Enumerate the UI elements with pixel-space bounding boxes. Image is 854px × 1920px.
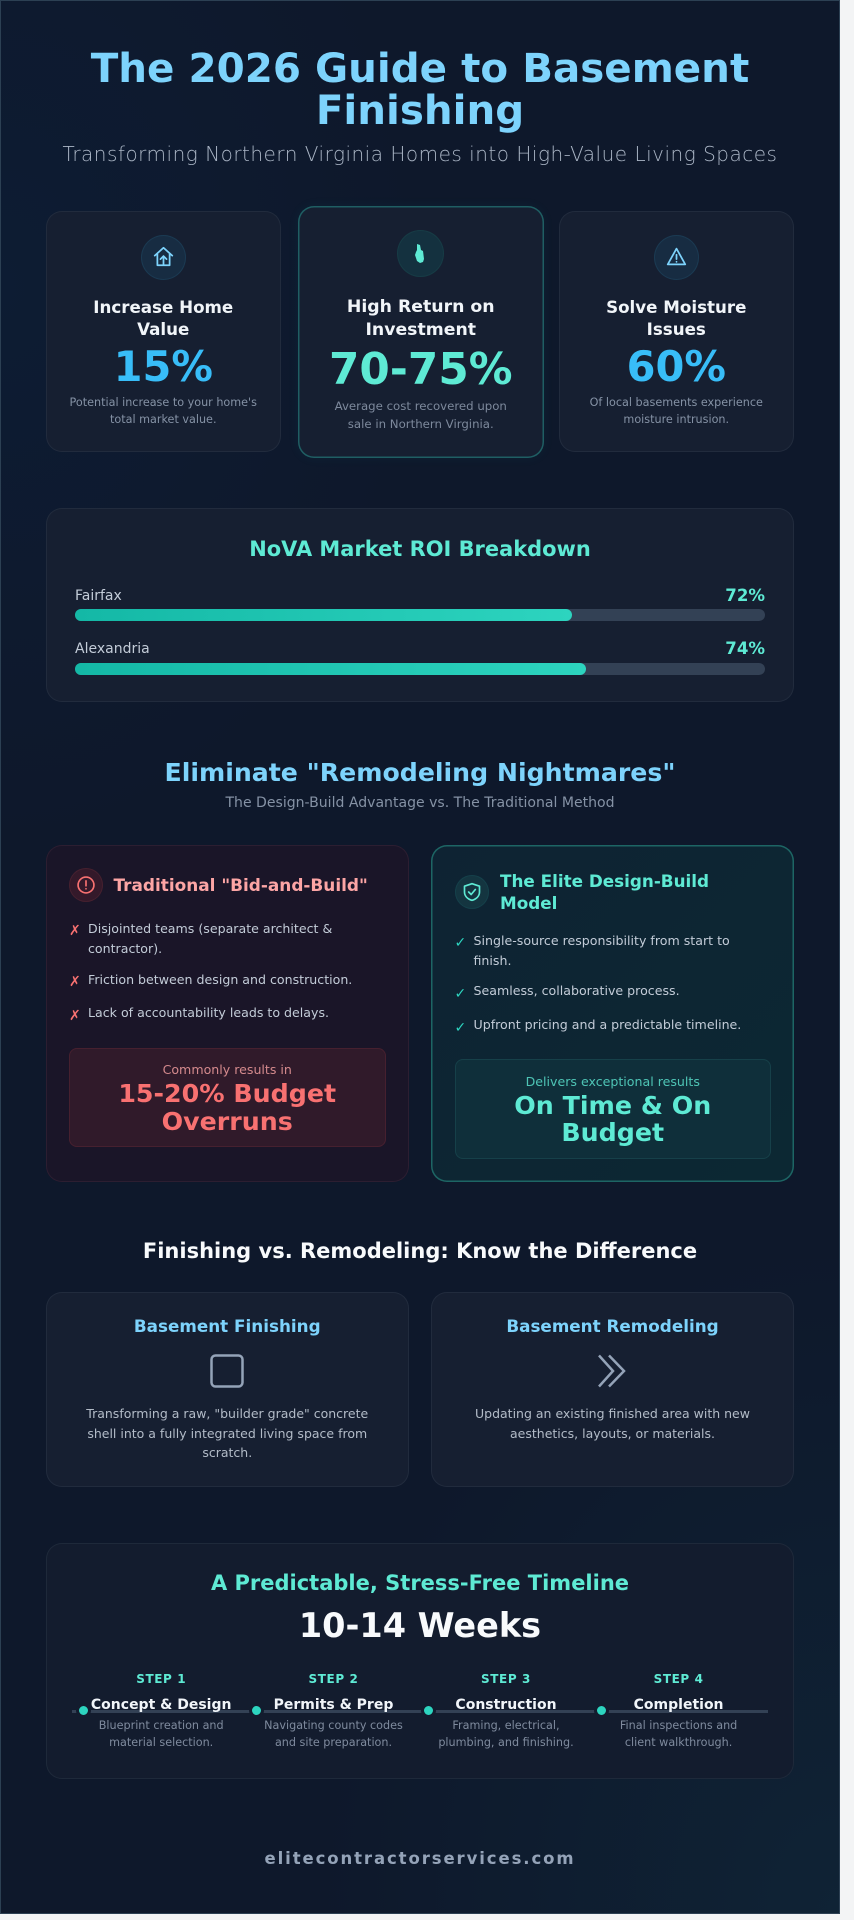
card heading: Issues — [647, 319, 706, 339]
marker: ✗ — [69, 1008, 81, 1024]
list item — [474, 932, 730, 968]
step 2: Permits & Prep — [274, 1697, 393, 1713]
section heading: Eliminate "Remodeling Nightmares" — [164, 758, 676, 787]
card description — [590, 396, 763, 426]
panel heading: Basement Remodeling — [506, 1316, 719, 1336]
panel: NoVA market ROI breakdown — [46, 508, 794, 702]
panel: high return on investment — [298, 206, 544, 458]
step 1: material selection. — [109, 1736, 213, 1749]
timeline heading: A Predictable, Stress-Free Timeline — [211, 1571, 629, 1595]
card description: Of local basements experience — [590, 396, 763, 408]
step 3: Framing, electrical, — [452, 1719, 560, 1732]
step 1 — [91, 1672, 231, 1749]
panel: solve moisture issues — [559, 211, 794, 452]
step 4 — [620, 1672, 737, 1749]
bar label: Fairfax: Fairfax — [75, 588, 122, 604]
step 3: Construction — [455, 1697, 557, 1713]
list item: Friction between design and construction. — [88, 972, 352, 986]
card heading: High Return on — [347, 297, 495, 317]
bar: Fairfax 72% — [75, 609, 765, 621]
callout value — [118, 1079, 336, 1136]
dot — [248, 1702, 264, 1718]
card heading: Investment — [365, 320, 476, 340]
panel description: scratch. — [202, 1445, 252, 1460]
callout label: Delivers exceptional results — [526, 1074, 700, 1089]
list item: Seamless, collaborative process. — [474, 983, 680, 998]
callout value — [514, 1090, 711, 1147]
card description: total market value. — [110, 412, 216, 426]
step 2: STEP 2 — [309, 1672, 358, 1686]
marker: ✗ — [69, 974, 81, 990]
panel description: Updating an existing finished area with new — [475, 1406, 750, 1421]
step 1: STEP 1 — [136, 1672, 186, 1686]
icon: green blob — [397, 230, 444, 276]
card heading: Solve Moisture — [606, 296, 746, 316]
list item: Lack of accountability leads to delays. — [88, 1005, 329, 1020]
title: Finishing — [316, 86, 524, 134]
panel description: aesthetics, layouts, or materials. — [510, 1426, 715, 1441]
bar value: 72%: 72% — [725, 586, 765, 605]
step 3: plumbing, and finishing. — [438, 1736, 574, 1749]
card heading — [347, 297, 495, 340]
card heading: Increase Home — [93, 296, 233, 316]
list item: Disjointed teams (separate architect & — [88, 920, 332, 936]
timeline track — [72, 1710, 768, 1712]
callout: budget overruns — [69, 1048, 386, 1147]
callout value: Overruns — [162, 1107, 293, 1136]
card heading — [93, 296, 233, 339]
list item: Single-source responsibility from start to — [474, 932, 730, 948]
panel: increase home value — [46, 211, 280, 452]
card description: Average cost recovered upon — [335, 399, 507, 413]
step 2: Navigating county codes — [264, 1719, 403, 1732]
panel description — [475, 1406, 750, 1441]
step 4: client walkthrough. — [625, 1736, 732, 1749]
stat: 15% — [114, 342, 213, 391]
panel heading: The Elite Design-Build — [500, 871, 709, 891]
marker: ✓ — [454, 986, 466, 1002]
callout value: 15-20% Budget — [118, 1079, 336, 1108]
step 2: and site preparation. — [275, 1736, 392, 1749]
step 4: Completion — [634, 1697, 724, 1713]
panel description: Transforming a raw, "builder grade" concrete — [86, 1406, 368, 1421]
panel: basement finishing — [46, 1292, 408, 1486]
dot — [76, 1702, 90, 1718]
list item: Upfront pricing and a predictable timeline. — [474, 1017, 741, 1032]
chart heading: NoVA Market ROI Breakdown — [249, 537, 591, 561]
marker: ✗ — [69, 923, 81, 939]
card description: Potential increase to your home's — [70, 396, 257, 408]
section heading: Finishing vs. Remodeling: Know the Difference — [143, 1239, 697, 1263]
callout value: On Time & On — [514, 1090, 711, 1120]
step 4: Final inspections and — [620, 1719, 737, 1732]
icon: house with up arrow — [140, 234, 186, 280]
step 1: Concept & Design — [91, 1697, 231, 1713]
stat: 70-75% — [329, 344, 512, 395]
panel description — [86, 1406, 368, 1460]
marker: ✓ — [454, 935, 466, 951]
icon: alert circle — [69, 868, 103, 902]
step 2 — [264, 1672, 403, 1749]
timeline duration: 10-14 Weeks — [299, 1606, 541, 1645]
bar value: 74%: 74% — [725, 639, 765, 658]
icon: square — [210, 1354, 244, 1388]
bar: Alexandria 74% — [75, 663, 765, 675]
list item: finish. — [474, 952, 511, 968]
panel: basement remodeling — [431, 1292, 794, 1486]
panel heading: Model — [500, 893, 557, 913]
panel description: shell into a fully integrated living space from — [87, 1426, 367, 1441]
panel heading: Basement Finishing — [134, 1316, 321, 1336]
card description: sale in Northern Virginia. — [348, 416, 494, 430]
step 4: STEP 4 — [654, 1672, 704, 1686]
icon: double chevron — [598, 1354, 626, 1388]
marker: ✓ — [454, 1020, 466, 1036]
list item — [88, 920, 332, 956]
icon: warning triangle — [654, 234, 698, 280]
panel: elite design-build model — [431, 845, 794, 1182]
card description — [70, 396, 257, 426]
callout label: Commonly results in — [163, 1062, 292, 1077]
subtitle: Transforming Northern Virginia Homes into High-Value Living Spaces — [63, 142, 777, 166]
card description — [334, 399, 507, 430]
step 3: STEP 3 — [481, 1672, 531, 1686]
step 1: Blueprint creation and — [99, 1719, 224, 1732]
callout: on time and on budget — [455, 1059, 770, 1159]
panel heading: Traditional "Bid-and-Build" — [114, 875, 368, 895]
callout value: Budget — [561, 1118, 664, 1147]
stat: 60% — [627, 342, 726, 391]
footer website: elitecontractorservices.com — [264, 1849, 575, 1868]
card description: moisture intrusion. — [623, 412, 729, 426]
panel heading — [500, 871, 709, 913]
title: The 2026 Guide to Basement — [91, 44, 749, 92]
dot — [420, 1702, 436, 1718]
step 3 — [438, 1672, 574, 1749]
list item: contractor). — [88, 940, 162, 956]
bar label: Alexandria: Alexandria — [75, 641, 150, 657]
icon: shield check — [455, 875, 489, 909]
dot — [594, 1702, 608, 1718]
panel: traditional bid-and-build — [46, 845, 408, 1182]
panel: timeline — [46, 1543, 794, 1779]
title — [90, 44, 749, 134]
card heading — [606, 296, 746, 339]
section subheading: The Design-Build Advantage vs. The Traditional Method — [225, 795, 615, 811]
card heading: Value — [137, 319, 189, 339]
